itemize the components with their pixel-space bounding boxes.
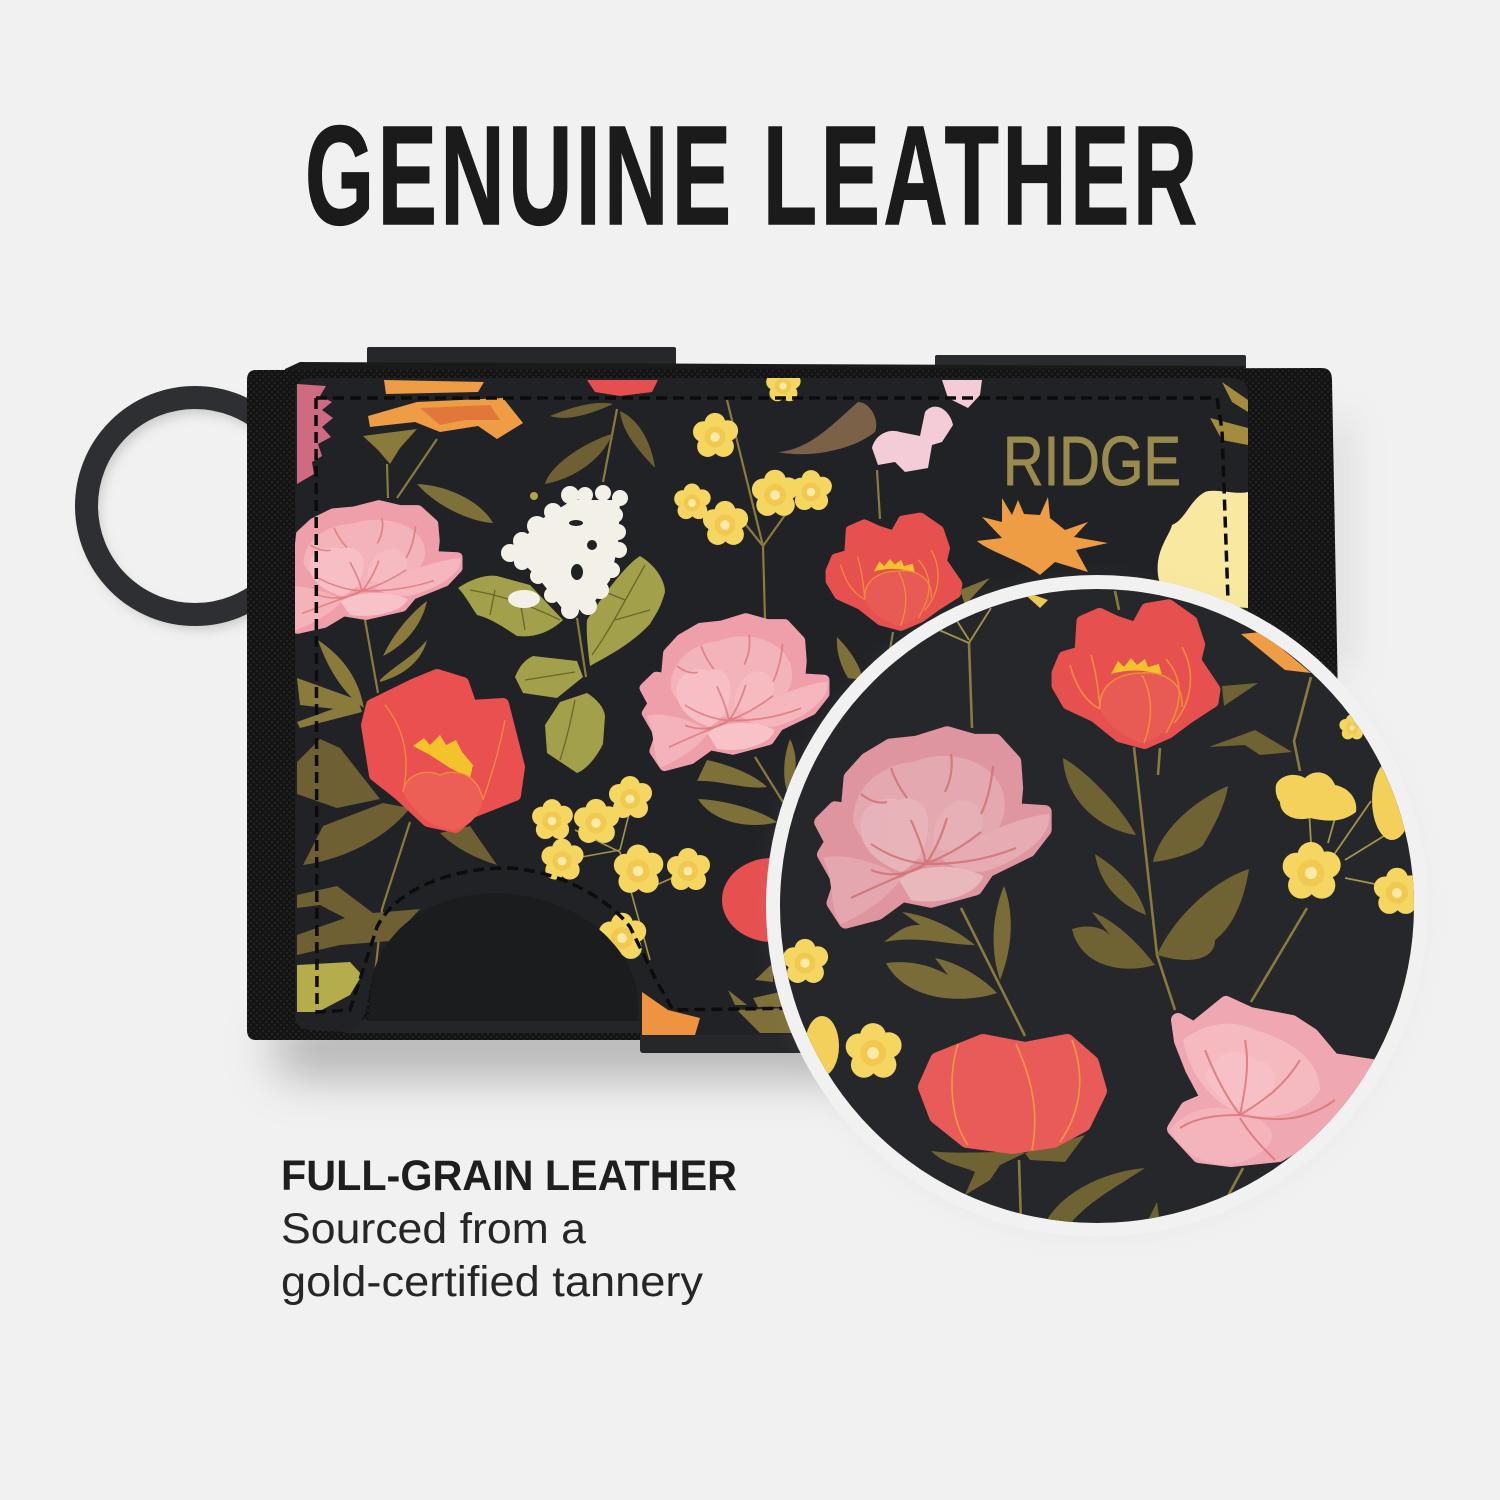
leather panel with floral print	[278, 368, 1248, 1035]
lens orange tip	[1241, 632, 1311, 673]
wallet shadow	[275, 1020, 1215, 1075]
gold leaf lower	[728, 963, 795, 1033]
pink peony centre	[645, 618, 828, 767]
top metal clip left	[367, 347, 676, 377]
herb leaves left	[297, 601, 427, 728]
pale pink buds	[872, 380, 982, 472]
magnifier lens shadow	[768, 581, 1426, 1239]
leaf by red flower	[837, 578, 990, 680]
leaves top-centre	[545, 403, 655, 484]
lens red flower bottom	[926, 1042, 1099, 1146]
caption	[281, 1152, 737, 1306]
lens leather	[780, 589, 1414, 1223]
leaf top-left	[417, 484, 493, 523]
orange flower top-left	[368, 380, 523, 439]
lens leaves	[884, 886, 1011, 999]
lens yellow flowers	[1276, 772, 1356, 821]
brown leaf	[778, 402, 876, 454]
elastic band	[247, 368, 1338, 1040]
orange flower right	[977, 497, 1108, 575]
lens yellow tip top	[1028, 595, 1048, 608]
lens red flower top	[1057, 605, 1215, 743]
caption line 2: gold-certified tannery	[281, 1258, 704, 1306]
orange corner bottom	[642, 992, 700, 1035]
caption heading: FULL-GRAIN LEATHER	[281, 1152, 737, 1200]
RIDGE logo: RIDGE	[1003, 422, 1181, 500]
red poppy left	[367, 675, 519, 830]
lens stems	[961, 591, 1311, 1224]
top band	[285, 362, 1245, 380]
olive leaves cluster	[458, 576, 563, 636]
bottom clip	[640, 1025, 840, 1053]
right side shadow	[1320, 420, 1350, 670]
stem and leaves under peony	[697, 739, 796, 825]
yellow flowers cluster low	[574, 816, 672, 960]
top metal clip right	[935, 355, 1246, 379]
pale yellow flower right	[1158, 491, 1248, 608]
title: GENUINE LEATHER	[305, 96, 1197, 254]
white blossom cluster	[501, 485, 628, 619]
lens border	[766, 575, 1428, 1237]
lens pink peony	[821, 733, 1049, 924]
icon: key ring	[86, 398, 304, 614]
metal plate under notch	[345, 1020, 645, 1033]
pink fringe top-left	[297, 384, 333, 484]
stitching	[316, 398, 1228, 1012]
red flower top cut	[587, 380, 658, 396]
key ring shadow	[91, 405, 307, 621]
yellow flowers upper	[693, 413, 738, 457]
stems	[365, 400, 893, 975]
notch pad	[368, 893, 640, 1021]
gold leaf top right	[1210, 382, 1248, 445]
wallet	[86, 347, 1338, 1053]
lens pink peony bottom	[1170, 1003, 1372, 1165]
magnifier lens	[766, 575, 1428, 1237]
red flower right	[830, 517, 958, 626]
caption line 1: Sourced from a	[281, 1205, 586, 1253]
red flower lower hidden	[722, 858, 770, 942]
pink peony left	[278, 505, 461, 631]
